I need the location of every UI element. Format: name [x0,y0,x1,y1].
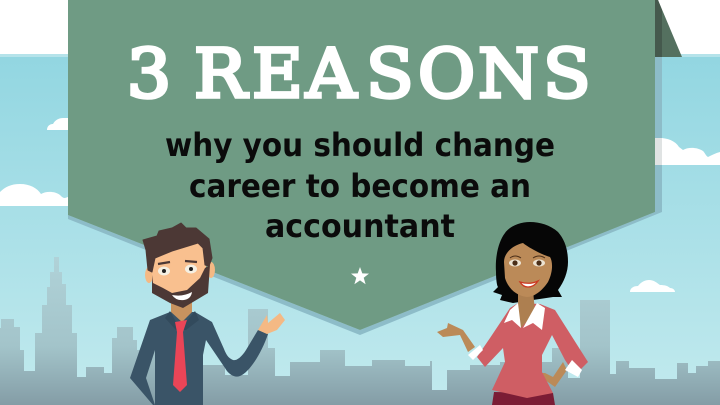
woman eyes [509,260,545,266]
man eyes [158,264,197,276]
subtitle: accountant [265,207,455,245]
woman hair [493,222,568,303]
cloud behind banner shadow [655,138,662,165]
man beard [152,265,210,308]
man neck [171,300,192,322]
woman face [504,243,552,297]
man suit [130,312,268,405]
clouds [0,118,720,292]
star icon [351,267,369,284]
title: 3 REASONS [127,36,591,114]
city skyline [0,257,720,405]
woman cuffs [468,345,582,377]
man hand [258,313,285,334]
man collar [165,311,199,330]
woman eyebrows [510,256,545,258]
woman blouse [477,303,588,398]
subtitle: career to become an [189,167,531,205]
green banner [68,0,655,330]
man smile [172,292,192,300]
woman neck [518,290,535,328]
banner fold [655,0,682,57]
man hair [143,223,212,272]
man tie [173,320,187,392]
banner shadow [68,57,662,335]
subtitle: why you should change [165,126,555,164]
man face [152,236,206,296]
woman skirt [492,392,555,405]
woman left forearm and hand [437,323,475,352]
woman smile [520,281,538,287]
woman right forearm and hand [533,362,567,387]
man character [130,223,285,405]
woman character [437,222,588,405]
woman collar [504,303,545,330]
man eyebrows [158,261,197,264]
man ears [145,262,215,283]
subtitle [165,126,555,245]
